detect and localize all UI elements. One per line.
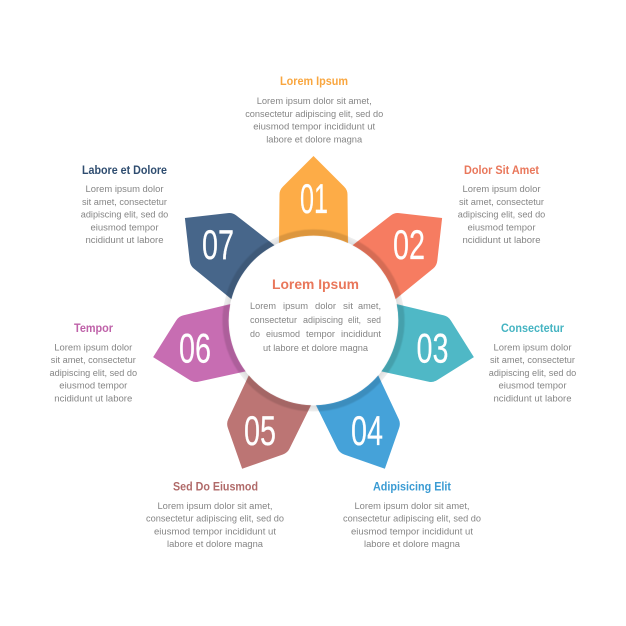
text block 04: Adipisicing Elit: labore et dolore magna	[364, 539, 461, 550]
text block 01: Lorem Ipsum: labore et dolore magna	[266, 134, 363, 145]
text block 01: Lorem Ipsum: Lorem Ipsum	[280, 76, 348, 88]
center body: adipiscing	[303, 315, 343, 326]
center body: dolor	[315, 301, 337, 312]
petal 02	[353, 191, 464, 299]
center body: do	[250, 329, 260, 340]
text block 04: Adipisicing Elit: Adipisicing Elit	[373, 482, 451, 494]
center text block	[250, 276, 381, 354]
petal 06	[145, 304, 246, 391]
center body: ut labore et dolore magna	[263, 343, 369, 354]
text block 07: Labore et Dolore: eiusmod tempor	[90, 222, 159, 233]
text block 06: Tempor	[50, 323, 137, 404]
petal 04	[316, 375, 416, 484]
text block 02: Dolor Sit Amet: Lorem ipsum dolor	[462, 184, 541, 195]
text block 04: Adipisicing Elit: consectetur adipiscing elit, sed do	[343, 514, 481, 524]
text block 03: Consectetur: eiusmod tempor	[498, 381, 567, 392]
center body: consectetur	[250, 315, 298, 326]
text block 02: Dolor Sit Amet: eiusmod tempor	[468, 222, 536, 233]
text block 02: Dolor Sit Amet: adipiscing elit, sed do	[458, 210, 545, 220]
text block 05: Sed Do Eiusmod	[146, 482, 284, 550]
text block 05: Sed Do Eiusmod: consectetur adipiscing elit, sed do	[146, 514, 284, 524]
petal 06: 06	[179, 324, 211, 372]
text block 02: Dolor Sit Amet: Dolor Sit Amet	[464, 165, 539, 177]
center body: ipsum	[283, 301, 308, 312]
center body: tempor	[306, 329, 336, 340]
text block 06: Tempor: adipiscing elit, sed do	[50, 368, 137, 379]
petal 04: 04	[351, 407, 383, 454]
text block 07: Labore et Dolore: sit amet, consectetur	[82, 197, 168, 208]
center body: Lorem	[250, 301, 276, 312]
text block 01: Lorem Ipsum: eiusmod tempor incididunt ut	[253, 122, 376, 132]
petal 02: 02	[393, 221, 425, 268]
petal 05: 05	[244, 407, 276, 454]
text block 03: Consectetur	[489, 323, 576, 404]
petal 07	[163, 191, 274, 299]
center body: incididunt	[341, 329, 381, 340]
text block 04: Adipisicing Elit: eiusmod tempor incididunt ut	[351, 526, 473, 537]
center body: elit,	[348, 315, 361, 326]
center body: sed	[367, 315, 381, 326]
ring	[226, 232, 402, 408]
text block 07: Labore et Dolore	[81, 165, 168, 246]
text block 06: Tempor: Lorem ipsum dolor	[54, 342, 133, 354]
center body: eiusmod	[266, 329, 300, 340]
center heading: Lorem Ipsum	[272, 276, 359, 292]
text block 04: Adipisicing Elit	[343, 482, 481, 550]
petal 03: 03	[416, 324, 448, 372]
text block 02: Dolor Sit Amet: sit amet, consectetur	[459, 197, 545, 208]
text block 07: Labore et Dolore: Lorem ipsum dolor	[86, 184, 164, 195]
text block 05: Sed Do Eiusmod: Lorem ipsum dolor sit amet,	[158, 501, 272, 512]
petal 05	[211, 375, 311, 484]
petal 03	[381, 304, 482, 391]
text block 05: Sed Do Eiusmod: eiusmod tempor incididunt ut	[154, 526, 276, 537]
text block 07: Labore et Dolore: adipiscing elit, sed do	[81, 210, 168, 220]
text block 06: Tempor: ncididunt ut labore	[54, 393, 132, 404]
text block 01: Lorem Ipsum	[245, 76, 383, 145]
center body: amet,	[358, 301, 381, 312]
center body: sit	[343, 301, 353, 312]
text block 05: Sed Do Eiusmod: Sed Do Eiusmod	[173, 482, 258, 494]
text block 07: Labore et Dolore: Labore et Dolore	[82, 165, 167, 177]
center body	[250, 301, 381, 354]
text block 06: Tempor: sit amet, consectetur	[51, 355, 137, 366]
text block 03: Consectetur: ncididunt ut labore	[494, 393, 572, 404]
petal 07: 07	[202, 221, 234, 268]
text block 07: Labore et Dolore: ncididunt ut labore	[86, 235, 164, 246]
petal 01: 01	[300, 175, 328, 222]
text block 02: Dolor Sit Amet: ncididunt ut labore	[462, 235, 540, 246]
text block 03: Consectetur: Consectetur	[501, 323, 564, 335]
text block 03: Consectetur: adipiscing elit, sed do	[489, 368, 576, 379]
text block 06: Tempor: Tempor	[74, 323, 113, 335]
text block 02: Dolor Sit Amet	[458, 165, 545, 246]
text block 06: Tempor: eiusmod tempor	[59, 381, 128, 392]
text block 05: Sed Do Eiusmod: labore et dolore magna	[167, 539, 264, 550]
text block 03: Consectetur: sit amet, consectetur	[490, 355, 576, 366]
text block 03: Consectetur: Lorem ipsum dolor	[494, 342, 572, 354]
text block 04: Adipisicing Elit: Lorem ipsum dolor sit amet,	[354, 501, 470, 512]
text block 01: Lorem Ipsum: consectetur adipiscing elit, sed do	[245, 109, 383, 120]
text block 01: Lorem Ipsum: Lorem ipsum dolor sit amet,	[257, 96, 372, 107]
petal 01	[279, 156, 348, 243]
